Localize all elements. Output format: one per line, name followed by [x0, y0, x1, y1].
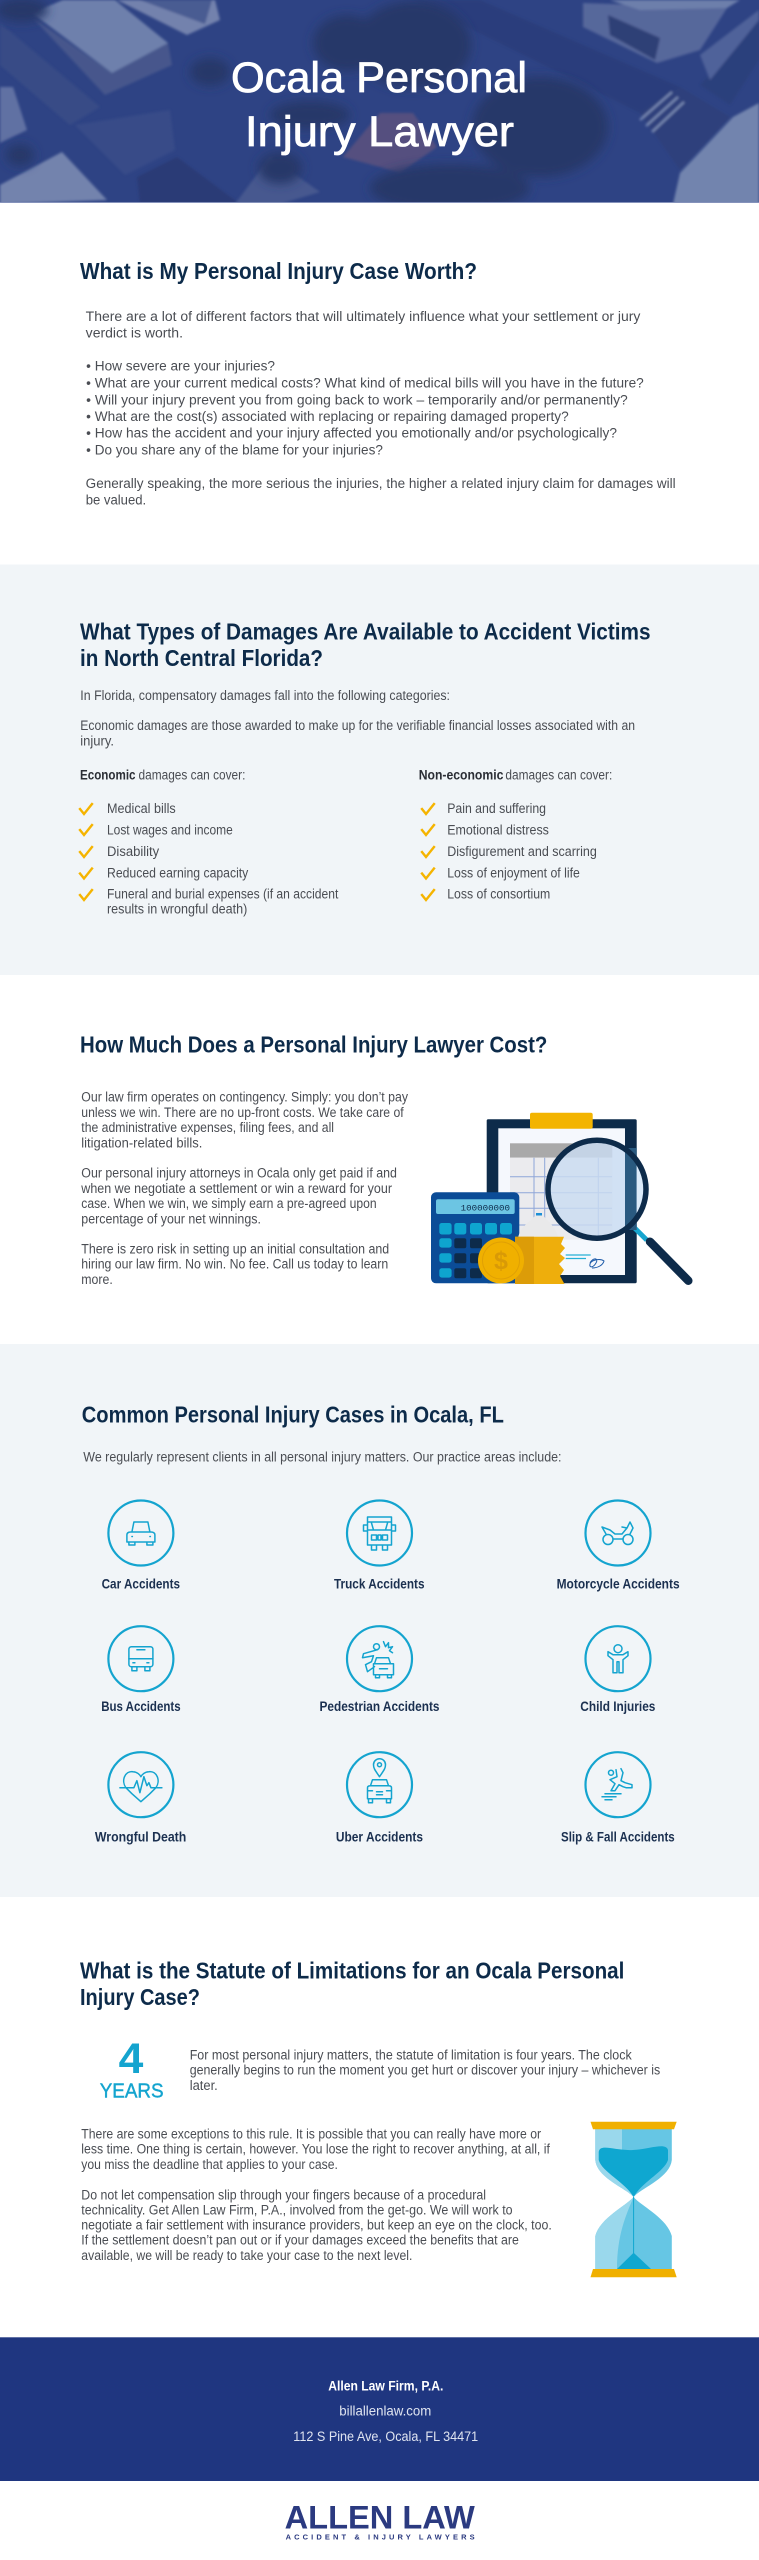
heading — [80, 1957, 624, 2010]
closing text: be valued. — [86, 492, 146, 507]
checklist: Lost wages and income — [107, 822, 233, 837]
checklist: Loss of consortium — [447, 887, 550, 902]
body text: available, we will be ready to take your case to the next level. — [81, 2248, 412, 2263]
icon: slipping person — [586, 1752, 650, 1817]
case: uber accidents: Uber Accidents — [336, 1830, 423, 1845]
column heading: damages can cover: — [505, 768, 612, 783]
heading: What is My Personal Injury Case Worth? — [80, 258, 477, 284]
icon: truck — [347, 1500, 412, 1566]
intro text — [86, 309, 641, 341]
intro text: There are a lot of different factors that will ultimately influence what your settlement or jury — [86, 309, 641, 324]
firm name: Allen Law Firm, P.A. — [328, 2379, 443, 2394]
icon: heartbeat — [108, 1752, 173, 1817]
icon: car — [108, 1500, 173, 1566]
panel: what is my case worth — [80, 258, 676, 507]
body text — [81, 2126, 552, 2263]
intro text: Economic damages are those awarded to make up for the verifiable financial losses associated with an — [80, 718, 635, 733]
column heading: Economic — [80, 768, 136, 783]
body text: you miss the deadline that applies to your case. — [81, 2157, 338, 2172]
website: billallenlaw.com — [339, 2404, 431, 2419]
intro text: injury. — [80, 733, 114, 748]
body text: Our law firm operates on contingency. Simply: you don’t pay — [81, 1090, 408, 1105]
heading — [80, 618, 650, 671]
closing text — [86, 476, 676, 507]
case: pedestrian accidents: Pedestrian Accidents — [320, 1699, 440, 1714]
stat: 4 years — [100, 2035, 164, 2102]
case: bus accidents: Bus Accidents — [101, 1699, 181, 1714]
case: motorcycle accidents: Motorcycle Accidents — [557, 1576, 680, 1591]
case: uber accidents — [336, 1752, 423, 1845]
coin stack — [478, 1237, 565, 1284]
stat: 4 years: 4 — [119, 2035, 143, 2083]
body text: There is zero risk in setting up an initial consultation and — [81, 1241, 389, 1256]
body text: If the settlement doesn’t pan out or if your damages exceed the benefits that are — [81, 2233, 519, 2248]
bullet list of questions: • Do you share any of the blame for your injuries? — [86, 442, 383, 457]
panel: hero banner — [0, 0, 759, 212]
money bag — [518, 1211, 558, 1238]
column heading: Non-economic — [419, 768, 504, 783]
body text: Our personal injury attorneys in Ocala only get paid if and — [81, 1166, 397, 1181]
body text: unless we win. There are no up-front costs. We take care of — [81, 1105, 404, 1120]
icon: motorcycle — [586, 1500, 650, 1566]
case: motorcycle accidents — [557, 1500, 680, 1591]
heading: in North Central Florida? — [80, 645, 323, 671]
case: slip and fall accidents — [561, 1752, 675, 1845]
case: truck accidents — [334, 1500, 424, 1591]
intro text — [80, 688, 635, 748]
checklist — [80, 801, 339, 916]
case: pedestrian accidents — [320, 1626, 440, 1714]
bullet list of questions: • How has the accident and your injury affected you emotionally and/or psychologically? — [86, 426, 617, 441]
heading: Common Personal Injury Cases in Ocala, FL — [82, 1402, 504, 1428]
clipboard — [487, 1113, 637, 1283]
title: Ocala Personal — [231, 54, 527, 102]
body text — [80, 1090, 408, 1287]
body text: the administrative expenses, filing fees, and all — [81, 1120, 334, 1135]
intro text: verdict is worth. — [86, 326, 183, 341]
stat explanation: generally begins to run the moment you get hurt or discover your injury – whichever is — [190, 2063, 660, 2078]
bullet list of questions: • What are the cost(s) associated with replacing or repairing damaged property? — [86, 409, 569, 424]
body text: There are some exceptions to this rule. It is possible that you can really have more or — [81, 2126, 542, 2141]
column: economic damages — [80, 768, 339, 916]
checklist: Disability — [107, 844, 159, 859]
body text: Do not let compensation slip through your fingers because of a procedural — [81, 2187, 486, 2202]
panel: types of damages — [0, 564, 759, 975]
magnifying glass — [548, 1140, 688, 1281]
column heading: damages can cover: — [138, 768, 245, 783]
address: 112 S Pine Ave, Ocala, FL 34471 — [293, 2429, 478, 2444]
body text: litigation-related bills. — [81, 1135, 202, 1150]
intro text: We regularly represent clients in all personal injury matters. Our practice areas include: — [83, 1450, 562, 1465]
body text: case. When we win, we simply earn a pre-agreed upon — [81, 1196, 377, 1211]
icon: hourglass — [590, 2122, 677, 2277]
body text: hiring our law firm. No win. No fee. Call us today to learn — [81, 1257, 388, 1272]
heading: How Much Does a Personal Injury Lawyer Cost? — [80, 1032, 547, 1058]
calculator — [431, 1192, 519, 1283]
title — [231, 54, 527, 156]
checklist: Disfigurement and scarring — [447, 844, 597, 859]
case: wrongful death — [95, 1752, 186, 1845]
body text: percentage of your net winnings. — [81, 1211, 261, 1226]
case: slip and fall accidents: Slip & Fall Accidents — [561, 1830, 675, 1845]
bullet list of questions: • How severe are your injuries? — [86, 359, 275, 374]
icon: bus — [108, 1626, 173, 1691]
case: car accidents — [102, 1500, 180, 1591]
checklist: Medical bills — [107, 801, 176, 816]
column heading — [80, 768, 245, 783]
case: child injuries: Child Injuries — [580, 1699, 655, 1714]
checklist: Emotional distress — [447, 822, 549, 837]
case: child injuries — [580, 1626, 655, 1714]
intro text: In Florida, compensatory damages fall into the following categories: — [80, 688, 450, 703]
checklist — [422, 801, 597, 902]
body text: when we negotiate a settlement or win a reward for your — [80, 1181, 392, 1196]
closing text: Generally speaking, the more serious the injuries, the higher a related injury claim for damages will — [86, 476, 676, 491]
case: wrongful death: Wrongful Death — [95, 1830, 186, 1845]
panel: common personal injury cases — [0, 1344, 759, 1897]
logo: Allen Law: ALLEN LAW — [285, 2499, 476, 2535]
calculator: 100000000 — [461, 1203, 510, 1213]
body text: technicality. Get Allen Law Firm, P.A., involved from the get-go. We will work to — [81, 2202, 513, 2217]
body text: more. — [81, 1272, 113, 1287]
coin stack: $ — [494, 1247, 508, 1275]
stat explanation — [190, 2047, 660, 2093]
column heading — [419, 768, 612, 783]
heading: What Types of Damages Are Available to Accident Victims — [80, 618, 650, 644]
column: non-economic damages — [419, 768, 612, 902]
heading: Injury Case? — [80, 1984, 200, 2010]
panel: statute of limitations — [80, 1957, 677, 2277]
checklist: Loss of enjoyment of life — [447, 865, 580, 880]
title: Injury Lawyer — [245, 108, 514, 156]
logo: Allen Law: ACCIDENT & INJURY LAWYERS — [286, 2532, 475, 2542]
checklist: Reduced earning capacity — [107, 865, 249, 880]
checklist: results in wrongful death) — [107, 901, 247, 916]
body text: less time. One thing is certain, however. You lose the right to recover anything, at all, if — [81, 2142, 550, 2157]
case: truck accidents: Truck Accidents — [334, 1576, 424, 1591]
panel: footer contact — [0, 2337, 759, 2481]
case: car accidents: Car Accidents — [102, 1576, 180, 1591]
illustration: clipboard, magnifier, calculator and coins — [431, 1113, 688, 1284]
icon: car with location pin — [347, 1752, 412, 1817]
heading: What is the Statute of Limitations for an Ocala Personal — [80, 1957, 624, 1983]
body text: negotiate a fair settlement with insurance providers, but keep an eye on the clock, too. — [81, 2217, 552, 2232]
panel: lawyer cost — [80, 1032, 688, 1287]
aerial city photo background — [0, 0, 759, 212]
checklist: Pain and suffering — [447, 801, 546, 816]
bullet list of questions: • What are your current medical costs? What kind of medical bills will you have in the future? — [86, 376, 644, 390]
icon: pedestrian struck by car — [347, 1626, 412, 1691]
stat: 4 years: YEARS — [100, 2080, 164, 2102]
stat explanation: For most personal injury matters, the statute of limitation is four years. The clock — [190, 2047, 632, 2062]
checklist: Funeral and burial expenses (if an accident — [107, 887, 339, 902]
bullet list of questions: • Will your injury prevent you from going back to work – temporarily and/or permanently? — [86, 392, 628, 407]
bullet list of questions — [86, 359, 644, 457]
stat explanation: later. — [190, 2078, 218, 2093]
case: bus accidents — [101, 1626, 181, 1714]
icon: child — [586, 1626, 650, 1691]
